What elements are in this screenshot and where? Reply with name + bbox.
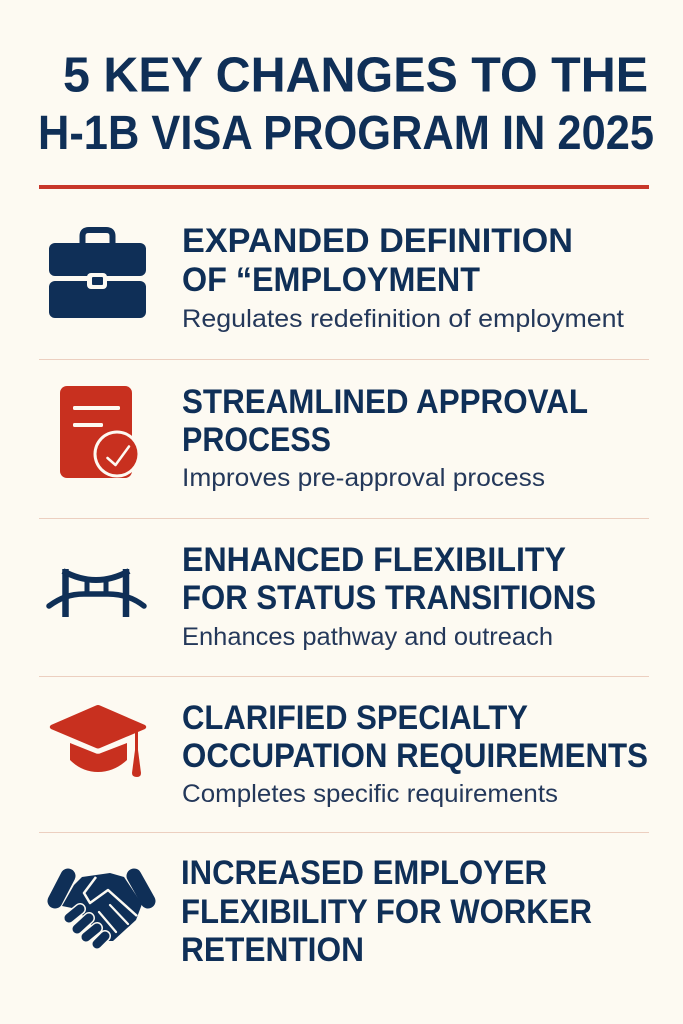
panel: increased employer flexibility	[55, 854, 592, 969]
heading	[182, 222, 573, 299]
icon: handshake	[55, 873, 148, 944]
heading: INCREASED EMPLOYER	[181, 854, 547, 892]
icon: briefcase	[49, 230, 146, 318]
heading: STREAMLINED APPROVAL	[182, 383, 588, 421]
description: Enhances pathway and outreach	[182, 623, 553, 651]
heading: RETENTION	[181, 931, 364, 969]
heading	[182, 541, 596, 617]
panel: enhanced flexibility	[49, 541, 596, 651]
description: Regulates redefinition of employment	[182, 305, 624, 333]
heading: PROCESS	[182, 421, 331, 459]
heading	[181, 854, 592, 969]
icon: document with check	[60, 386, 140, 478]
panel: clarified specialty occupation	[50, 699, 648, 808]
panel: streamlined approval process	[60, 383, 588, 492]
heading: CLARIFIED SPECIALTY	[182, 699, 528, 737]
heading: FOR STATUS TRANSITIONS	[182, 579, 596, 617]
description: Completes specific requirements	[182, 780, 558, 808]
title: 5 KEY CHANGES TO THE	[63, 48, 648, 102]
title	[38, 48, 654, 160]
heading: ENHANCED FLEXIBILITY	[182, 541, 566, 579]
description: Improves pre-approval process	[182, 464, 545, 492]
heading: OF “EMPLOYMENT	[182, 261, 480, 299]
heading: OCCUPATION REQUIREMENTS	[182, 737, 648, 775]
panel: expanded definition of employment	[49, 222, 624, 333]
heading: FLEXIBILITY FOR WORKER	[181, 893, 592, 931]
heading	[182, 699, 648, 775]
title rule	[39, 185, 649, 189]
icon: graduation cap	[50, 705, 146, 777]
heading: EXPANDED DEFINITION	[182, 222, 573, 260]
heading	[182, 383, 588, 459]
icon: bridge	[49, 569, 144, 617]
